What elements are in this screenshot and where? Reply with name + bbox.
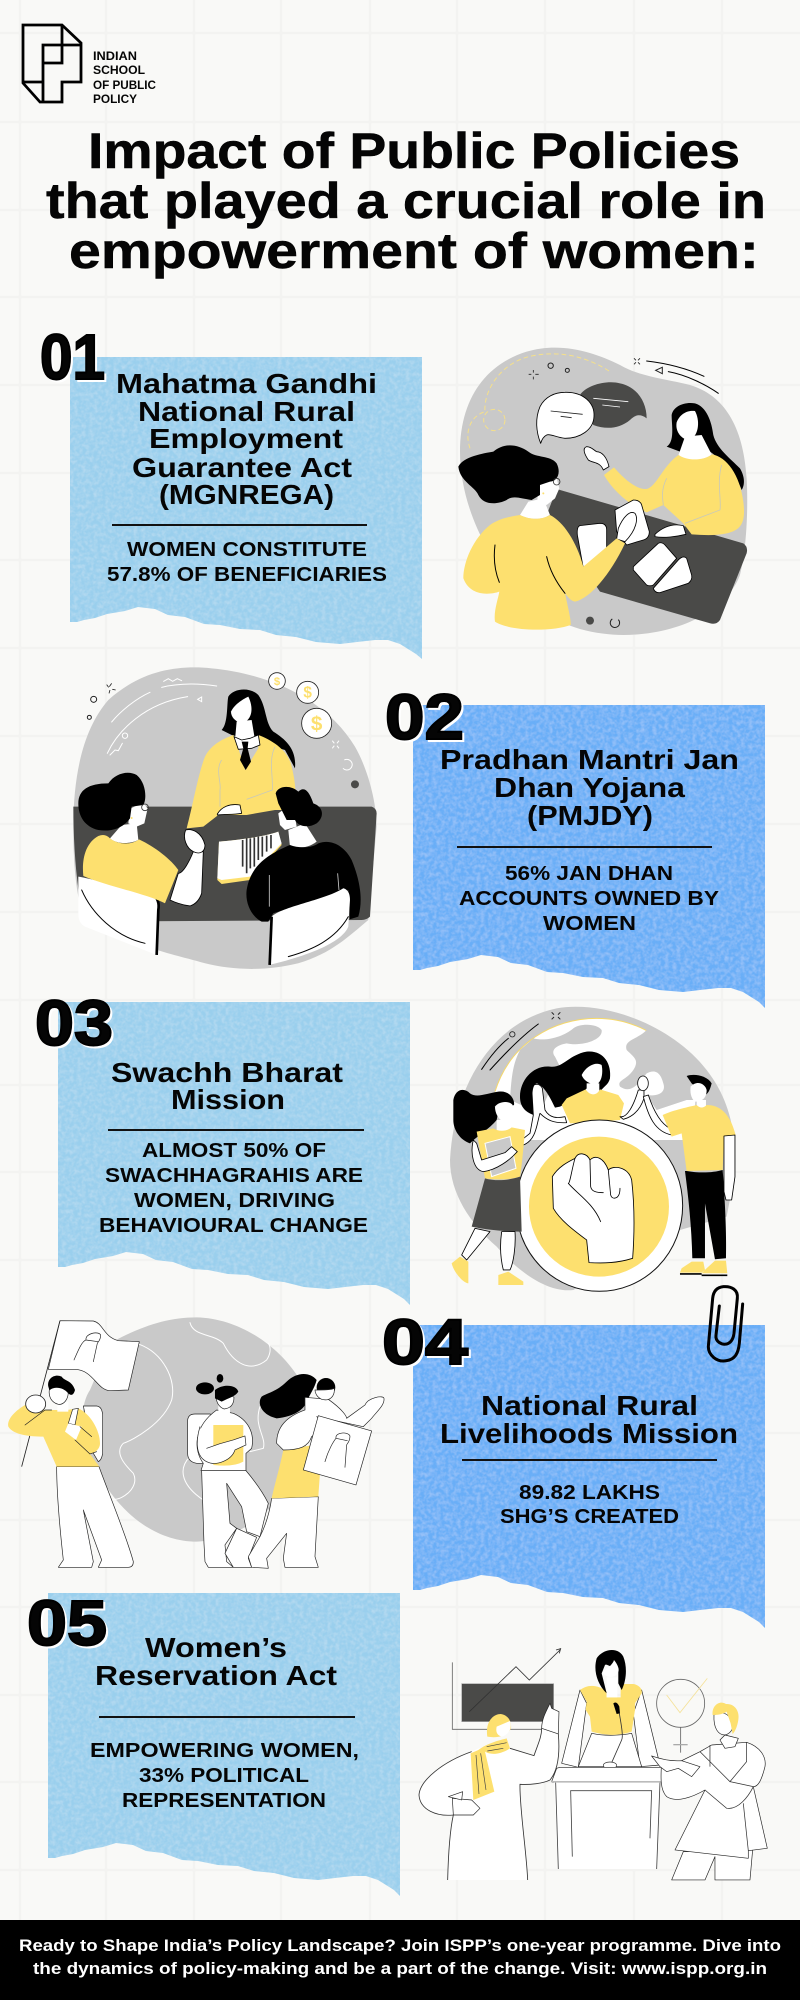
statistic xyxy=(90,1740,359,1812)
statistic: ACCOUNTS OWNED BY xyxy=(459,888,720,910)
statistic xyxy=(500,1482,679,1528)
heading xyxy=(440,744,739,831)
number 03: 03 xyxy=(37,989,115,1061)
footer call to action: Ready to Shape India’s Policy Landscape? Join ISPP’s one-year programme. Dive into xyxy=(19,1937,781,1955)
statistic: ALMOST 50% OF xyxy=(142,1140,326,1162)
heading: (PMJDY) xyxy=(527,800,653,831)
statistic: WOMEN xyxy=(543,913,636,935)
icon: paperclip xyxy=(708,1287,743,1361)
statistic: REPRESENTATION xyxy=(122,1790,326,1812)
heading: National Rural xyxy=(481,1390,698,1421)
panel: 03 Swachh Bharat Mission xyxy=(35,987,410,1305)
statistic: SWACHHAGRAHIS ARE xyxy=(105,1165,363,1187)
heading: Swachh Bharat xyxy=(111,1057,343,1088)
heading xyxy=(111,1057,343,1115)
heading xyxy=(95,1632,337,1691)
heading: Mission xyxy=(171,1084,285,1115)
statistic xyxy=(107,539,387,586)
coins: $ xyxy=(311,713,323,736)
heading xyxy=(116,368,377,510)
illustration: handshake meeting with coins xyxy=(73,667,377,969)
torn paper card xyxy=(58,1002,410,1305)
statistic: WOMEN CONSTITUTE xyxy=(127,539,367,561)
number 02: 02 xyxy=(385,681,464,753)
heading: (MGNREGA) xyxy=(159,479,334,510)
coins xyxy=(269,673,332,738)
footer call to action: the dynamics of policy-making and be a part of the change. Visit: www.ispp.org.in xyxy=(33,1960,767,1978)
logo: Indian School of Public Policy xyxy=(23,25,156,106)
coins: $ xyxy=(274,676,281,688)
logo wordmark: POLICY xyxy=(93,92,137,106)
illustration: two women talking at a table xyxy=(458,348,747,635)
number 03: 03 xyxy=(35,987,113,1059)
heading: Livelihoods Mission xyxy=(440,1418,738,1449)
torn paper card xyxy=(413,705,765,1008)
illustration: activists with flag and placard xyxy=(8,1317,384,1568)
heading: Dhan Yojana xyxy=(494,772,686,803)
torn paper card xyxy=(48,1593,400,1896)
statistic xyxy=(99,1140,368,1237)
statistic: 33% POLITICAL xyxy=(139,1765,309,1787)
heading xyxy=(440,1390,738,1449)
heading: National Rural xyxy=(138,396,355,427)
coins: $ xyxy=(303,685,312,702)
statistic: BEHAVIOURAL CHANGE xyxy=(99,1215,368,1237)
statistic: 56% JAN DHAN xyxy=(505,863,673,885)
number 04: 04 xyxy=(384,1308,470,1380)
statistic: 89.82 LAKHS xyxy=(519,1482,660,1504)
illustration: three people and raised fist xyxy=(450,1007,736,1291)
footer call to action xyxy=(0,1920,800,2000)
heading: Pradhan Mantri Jan xyxy=(440,744,739,775)
logo wordmark xyxy=(93,49,156,106)
number 01: 01 xyxy=(42,323,107,395)
panel: 02 PMJDY xyxy=(385,681,765,1008)
title: Impact of Public Policies xyxy=(88,123,740,179)
logo wordmark: OF PUBLIC xyxy=(93,78,156,92)
statistic: WOMEN, DRIVING xyxy=(134,1190,335,1212)
heading: Guarantee Act xyxy=(132,452,352,483)
number 05: 05 xyxy=(29,1589,109,1661)
illustration: woman speaking at a podium xyxy=(419,1649,767,1880)
logo wordmark: INDIAN xyxy=(93,49,137,63)
statistic: 57.8% OF BENEFICIARIES xyxy=(107,564,387,586)
number 04: 04 xyxy=(382,1306,468,1378)
title: empowerment of women: xyxy=(69,223,759,279)
heading: Women’s xyxy=(145,1632,287,1663)
statistic: EMPOWERING WOMEN, xyxy=(90,1740,359,1762)
number 05: 05 xyxy=(27,1587,107,1659)
heading: Employment xyxy=(149,423,343,454)
panel: 01 MGNREGA xyxy=(40,321,422,659)
title xyxy=(46,123,766,279)
number 01: 01 xyxy=(40,321,105,393)
torn paper card xyxy=(413,1325,765,1628)
statistic: SHG’S CREATED xyxy=(500,1506,679,1528)
title: that played a crucial role in xyxy=(46,173,766,229)
number 02: 02 xyxy=(387,683,466,755)
heading: Mahatma Gandhi xyxy=(116,368,377,399)
statistic xyxy=(459,863,720,935)
torn paper card xyxy=(70,357,422,659)
logo wordmark: SCHOOL xyxy=(93,63,145,77)
logo mark xyxy=(23,25,81,102)
panel: 05 Women's Reservation Act xyxy=(27,1587,400,1896)
panel: 04 National Rural Livelihoods Mission xyxy=(382,1287,765,1628)
heading: Reservation Act xyxy=(95,1660,337,1691)
